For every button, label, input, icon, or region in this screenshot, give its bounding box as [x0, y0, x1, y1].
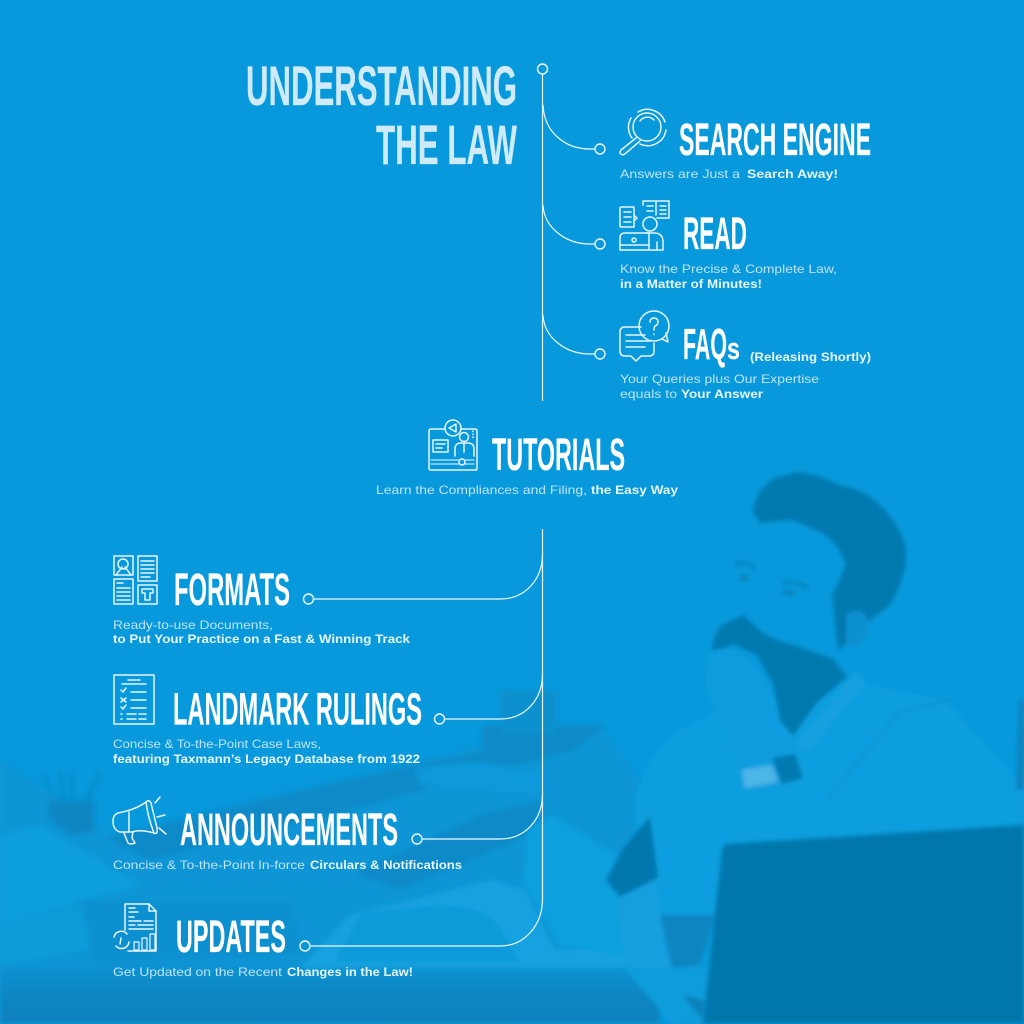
description: tutorials: Learn the Compliances and Filing, — [376, 483, 587, 497]
icon: magnifying glass — [620, 109, 666, 155]
item: updates — [113, 904, 413, 979]
icon: speech bubbles with question mark — [620, 311, 669, 361]
description: tutorials: the Easy Way — [591, 483, 678, 497]
icon: reader with laptop and book — [620, 201, 669, 250]
heading: FAQs: FAQ — [683, 320, 727, 369]
description: announcements — [113, 858, 462, 872]
description: updates — [113, 965, 413, 979]
icon: document with chart and refresh — [114, 904, 156, 951]
photo: laptop — [703, 825, 1024, 1024]
photo: man — [606, 472, 1024, 1024]
description: landmark rulings — [113, 737, 420, 766]
heading: read: READ — [683, 208, 747, 259]
heading: announcements: ANNOUNCEMENTS — [180, 804, 398, 855]
icon: document formats — [114, 556, 157, 604]
description: search engine: Answers are Just a — [620, 167, 740, 181]
description: formats: Ready-to-use Documents, — [113, 618, 273, 632]
description: FAQs: equals to — [620, 387, 677, 401]
heading: updates: UPDATES — [176, 911, 286, 962]
description: read — [620, 262, 837, 291]
description: FAQs — [620, 372, 819, 401]
label: releasing shortly: (Releasing Shortly) — [750, 350, 871, 364]
heading: FAQs — [683, 320, 740, 369]
title: THE LAW — [376, 113, 517, 176]
icon: megaphone — [113, 797, 166, 844]
description: announcements: Concise & To-the-Point In-force — [113, 858, 305, 872]
photo: desk scene — [0, 690, 672, 1024]
title — [246, 54, 517, 176]
item: announcements — [113, 797, 462, 872]
description: updates: Get Updated on the Recent — [113, 965, 283, 979]
description: announcements: Circulars & Notifications — [310, 858, 462, 872]
background photo: man at desk — [0, 472, 1024, 1024]
connector: bottom timeline — [300, 529, 542, 951]
item: tutorials — [376, 420, 678, 497]
icon: checklist — [114, 675, 154, 724]
description: updates: Changes in the Law! — [287, 965, 413, 979]
heading: landmark rulings: LANDMARK RULINGS — [173, 684, 422, 734]
item: FAQs — [620, 311, 871, 401]
title: UNDERSTANDING — [246, 54, 517, 117]
item: formats — [113, 556, 410, 646]
description: search engine: Search Away! — [747, 167, 838, 181]
description: FAQs: Your Answer — [681, 387, 763, 401]
heading: tutorials: TUTORIALS — [492, 429, 625, 480]
description: landmark rulings: featuring Taxmann’s Legacy Database from 1922 — [113, 752, 420, 766]
item: search engine — [620, 109, 871, 181]
item: landmark rulings — [113, 675, 422, 766]
description: formats: to Put Your Practice on a Fast & Winning Track — [113, 632, 410, 646]
heading: FAQs: s — [727, 331, 740, 366]
description: landmark rulings: Concise & To-the-Point Case Laws, — [113, 737, 321, 751]
heading: formats: FORMATS — [174, 564, 290, 615]
description: read: Know the Precise & Complete Law, — [620, 262, 837, 276]
description: search engine — [620, 167, 838, 181]
item: read — [620, 201, 837, 291]
icon: video tutorial screen — [429, 420, 477, 470]
description: tutorials — [376, 483, 678, 497]
connector: top timeline — [538, 64, 605, 401]
description: read: in a Matter of Minutes! — [620, 277, 762, 291]
description: formats — [113, 618, 410, 646]
description: FAQs: Your Queries plus Our Expertise — [620, 372, 819, 386]
